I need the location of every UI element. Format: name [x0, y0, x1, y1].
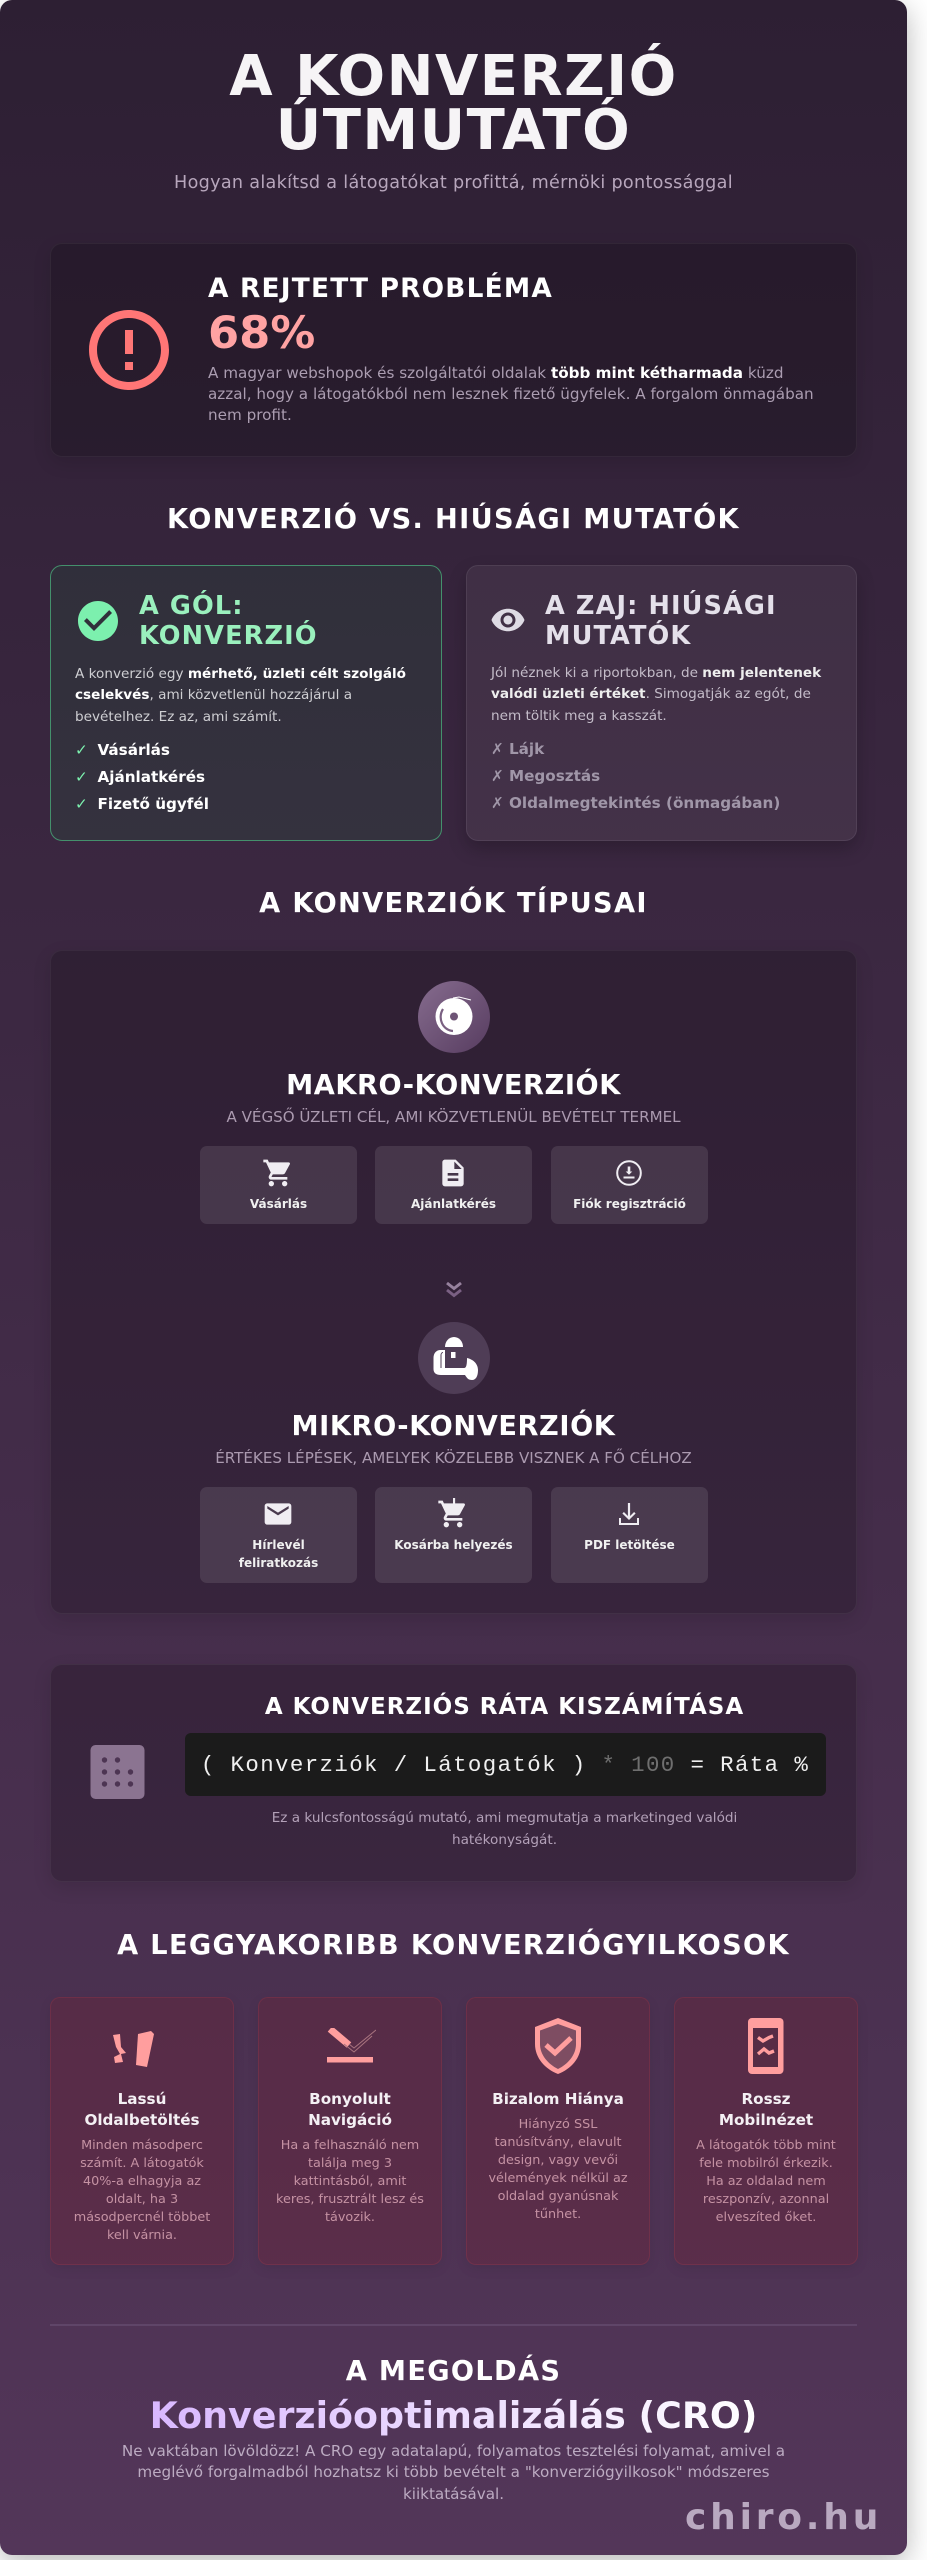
solution text: kiiktatásával. — [403, 2485, 504, 2503]
macro subtitle: A VÉGSŐ ÜZLETI CÉL, AMI KÖZVETLENÜL BEVÉTELT TERMEL — [226, 1108, 681, 1126]
description: Hiányzó SSL — [519, 2116, 597, 2132]
formula caption — [272, 1810, 737, 1848]
panel: formula — [50, 1664, 857, 1882]
title: Navigáció — [308, 2111, 392, 2129]
noise list: Megosztás — [509, 767, 600, 785]
description: Ha a felhasználó nem — [281, 2138, 419, 2152]
description — [74, 2138, 210, 2243]
title: Mobilnézet — [719, 2111, 813, 2129]
macro item: account: Fiók regisztráció — [573, 1197, 686, 1211]
goal heading: KONVERZIÓ — [139, 621, 318, 651]
problem text: nem profit. — [208, 406, 292, 424]
card: trust — [466, 1997, 650, 2265]
noise list: ✗ — [491, 767, 504, 785]
description: tűnhet. — [535, 2207, 581, 2222]
panel: goal conversion — [50, 565, 442, 841]
description: vélemények nélkül az — [488, 2171, 628, 2186]
problem heading: A REJTETT PROBLÉMA — [208, 273, 553, 304]
micro heading: MIKRO-KONVERZIÓK — [292, 1411, 615, 1442]
description: design, vagy vevői — [498, 2153, 618, 2168]
noise heading: A ZAJ: HIÚSÁGI — [545, 591, 777, 621]
card: mobile — [674, 1997, 858, 2265]
formula code box — [184, 1733, 826, 1796]
icon: broken bar — [113, 2031, 154, 2067]
noise heading — [545, 590, 777, 651]
description: találja meg 3 — [308, 2156, 392, 2171]
macro heading: MAKRO-KONVERZIÓK — [286, 1070, 621, 1101]
macro item: purchase: Vásárlás — [250, 1197, 307, 1211]
icon: micro lock — [418, 1322, 490, 1394]
solution text: Ne vaktában lövöldözz! A CRO egy adatalapú, folyamatos tesztelési folyamat, amivel a — [122, 2442, 785, 2460]
goal list: ✓ — [75, 768, 88, 786]
formula code box: ( Konverziók / Látogatók ) * 100 = Ráta % — [201, 1752, 809, 1778]
macro item: purchase — [200, 1146, 357, 1224]
solution text: meglévő forgalmadból hozhatsz ki több bevételt a "konverziógyilkosok" módszeres — [137, 2463, 770, 2481]
description: fele mobilról érkezik. — [699, 2156, 833, 2171]
micro item: newsletter: feliratkozás — [239, 1556, 318, 1570]
micro item: add to cart — [375, 1487, 532, 1583]
goal list: Ajánlatkérés — [98, 768, 205, 786]
section heading: killers: A LEGGYAKORIBB KONVERZIÓGYILKOSOK — [117, 1930, 790, 1960]
goal heading: A GÓL: — [139, 591, 244, 621]
problem text: azzal, hogy a látogatókból nem lesznek fizető ügyfelek. A forgalom önmagában — [208, 385, 814, 403]
card: slow load — [50, 1997, 234, 2265]
problem text: A magyar webshopok és szolgáltatói oldalak több mint kétharmada küzd — [208, 364, 783, 382]
description: Ha az oldalad nem — [706, 2174, 826, 2189]
noise text: Jól néznek ki a riportokban, de nem jelentenek — [491, 665, 821, 681]
card: navigation — [258, 1997, 442, 2265]
title: Oldalbetöltés — [84, 2111, 200, 2129]
title — [84, 2090, 200, 2129]
description: kattintásból, amit — [294, 2174, 406, 2189]
description: számít. A látogatók — [80, 2156, 204, 2171]
panel: hidden problem — [50, 243, 857, 457]
noise heading: MUTATÓK — [545, 621, 691, 651]
title: Bizalom Hiánya — [492, 2090, 624, 2108]
goal text: A konverzió egy mérhető, üzleti célt szolgáló — [75, 666, 406, 682]
formula heading: A KONVERZIÓS RÁTA KISZÁMÍTÁSA — [265, 1694, 744, 1720]
goal list: Vásárlás — [98, 741, 170, 759]
title: ÚTMUTATÓ — [276, 98, 631, 163]
noise list: ✗ — [491, 794, 504, 812]
icon: calculator — [90, 1745, 144, 1799]
description: másodpercnél többet — [74, 2210, 210, 2225]
panel: conversion types — [50, 950, 857, 1614]
arrow: double chevron — [446, 1282, 462, 1298]
stat: 68%: 68% — [208, 306, 315, 359]
title — [229, 43, 678, 163]
panel: noise vanity metrics — [466, 565, 857, 841]
section heading: types: A KONVERZIÓK TÍPUSAI — [259, 888, 648, 918]
description: kell várnia. — [107, 2228, 177, 2243]
noise list: Oldalmegtekintés (önmagában) — [509, 794, 780, 812]
goal list: Fizető ügyfél — [98, 795, 209, 813]
macro item: quote — [375, 1146, 532, 1224]
micro subtitle: ÉRTÉKES LÉPÉSEK, AMELYEK KÖZELEBB VISZNEK A FŐ CÉLHOZ — [215, 1449, 692, 1467]
watermark: chiro.hu — [685, 2497, 882, 2538]
noise text — [490, 665, 822, 724]
icon: shield check — [535, 2018, 581, 2074]
macro item: quote: Ajánlatkérés — [411, 1197, 496, 1211]
goal text: bevételhez. Ez az, ami számít. — [75, 709, 282, 725]
goal list: ✓ — [75, 741, 88, 759]
micro item: newsletter — [200, 1487, 357, 1583]
description — [276, 2138, 424, 2225]
goal heading — [139, 590, 318, 651]
micro item: pdf download: PDF letöltése — [584, 1538, 675, 1552]
goal list — [75, 741, 209, 813]
section heading: conversion vs vanity: KONVERZIÓ VS. HIÚSÁGI MUTATÓK — [167, 504, 740, 535]
solution title: Konverzióoptimalizálás (CRO) — [150, 2394, 757, 2437]
description: távozik. — [325, 2210, 375, 2225]
icon: eye — [492, 608, 524, 632]
goal text: cselekvés, ami közvetlenül hozzájárul a — [75, 687, 352, 703]
icon: check circle — [78, 601, 118, 641]
description: tanúsítvány, elavult — [494, 2135, 622, 2150]
goal text — [75, 666, 406, 725]
noise text: valódi üzleti értéket. Simogatják az egót, de — [491, 686, 811, 702]
title — [719, 2090, 813, 2129]
formula caption: hatékonyságát. — [452, 1832, 557, 1848]
description: oldalad gyanúsnak — [498, 2189, 618, 2204]
description: keres, frusztrált lesz és — [276, 2192, 424, 2207]
icon: phone — [748, 2018, 784, 2074]
title — [308, 2090, 392, 2129]
noise list — [491, 740, 780, 812]
subtitle: Hogyan alakítsd a látogatókat profittá, mérnöki pontossággal — [174, 173, 733, 193]
noise list: Lájk — [509, 740, 544, 758]
description: 40%-a elhagyja az — [83, 2174, 201, 2189]
description: A látogatók több mint — [696, 2138, 836, 2152]
micro item: add to cart: Kosárba helyezés — [394, 1538, 513, 1552]
title: Lassú — [118, 2090, 166, 2108]
problem text — [208, 364, 814, 424]
description: reszponzív, azonnal — [703, 2192, 829, 2207]
noise text: nem töltik meg a kasszát. — [491, 708, 667, 724]
goal list: ✓ — [75, 795, 88, 813]
formula caption: Ez a kulcsfontosságú mutató, ami megmutatja a marketinged valódi — [272, 1810, 737, 1826]
title: Rossz — [741, 2090, 791, 2108]
icon: warning circle — [89, 310, 169, 390]
micro item: pdf download — [551, 1487, 708, 1583]
icon: macro target — [418, 981, 490, 1053]
description: Minden másodperc — [81, 2138, 203, 2152]
solution heading: A MEGOLDÁS — [346, 2356, 561, 2387]
description — [488, 2116, 628, 2222]
solution text — [122, 2442, 785, 2503]
description — [696, 2138, 836, 2225]
icon: crossed check — [327, 2028, 376, 2062]
macro item: account — [551, 1146, 708, 1224]
micro item: newsletter: Hírlevél — [252, 1538, 305, 1552]
title: Bonyolult — [309, 2090, 391, 2108]
title: A KONVERZIÓ — [229, 44, 678, 109]
noise list: ✗ — [491, 740, 504, 758]
description: oldalt, ha 3 — [106, 2192, 178, 2207]
description: elveszíted őket. — [716, 2210, 816, 2225]
